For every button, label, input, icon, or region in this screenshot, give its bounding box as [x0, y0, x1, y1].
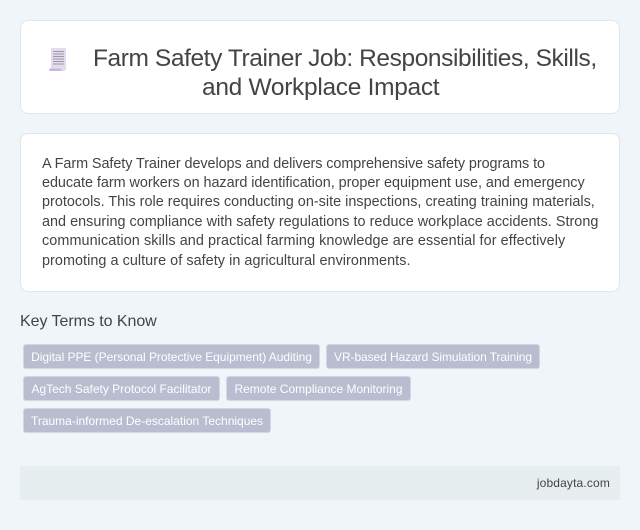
icon: document scroll — [49, 48, 66, 71]
description text: and ensuring compliance with safety regulations to reduce workplace accidents. Strong — [42, 214, 598, 230]
description text: protocols. This role requires conducting on-site inspections, creating training materials, — [42, 194, 595, 210]
footer bar — [20, 466, 620, 500]
tag list — [23, 344, 540, 433]
tag: Digital PPE (Personal Protective Equipment) Auditing — [31, 350, 312, 364]
tag: AgTech Safety Protocol Facilitator — [31, 382, 212, 396]
tag — [23, 376, 220, 401]
tag: Trauma-informed De-escalation Techniques — [31, 414, 263, 428]
panel: title card — [20, 20, 620, 114]
tag — [23, 344, 320, 369]
tag — [326, 344, 540, 369]
description text: communication skills and practical farming knowledge are essential for effectively — [42, 233, 565, 249]
heading: key terms: Key Terms to Know — [20, 313, 157, 330]
panel: description — [20, 133, 620, 292]
title: and Workplace Impact — [202, 74, 439, 101]
tag: Remote Compliance Monitoring — [234, 382, 403, 396]
footer source: jobdayta.com — [537, 476, 610, 490]
title: Farm Safety Trainer Job: Responsibilities, Skills, — [93, 45, 597, 72]
description text: promoting a culture of safety in agricultural environments. — [42, 253, 410, 269]
tag — [23, 408, 271, 433]
title — [93, 45, 597, 101]
description text — [42, 156, 598, 269]
description text: A Farm Safety Trainer develops and delivers comprehensive safety programs to — [42, 156, 545, 172]
tag: VR-based Hazard Simulation Training — [334, 350, 532, 364]
tag — [226, 376, 411, 401]
description text: educate farm workers on hazard identification, proper equipment use, and emergency — [42, 175, 585, 191]
